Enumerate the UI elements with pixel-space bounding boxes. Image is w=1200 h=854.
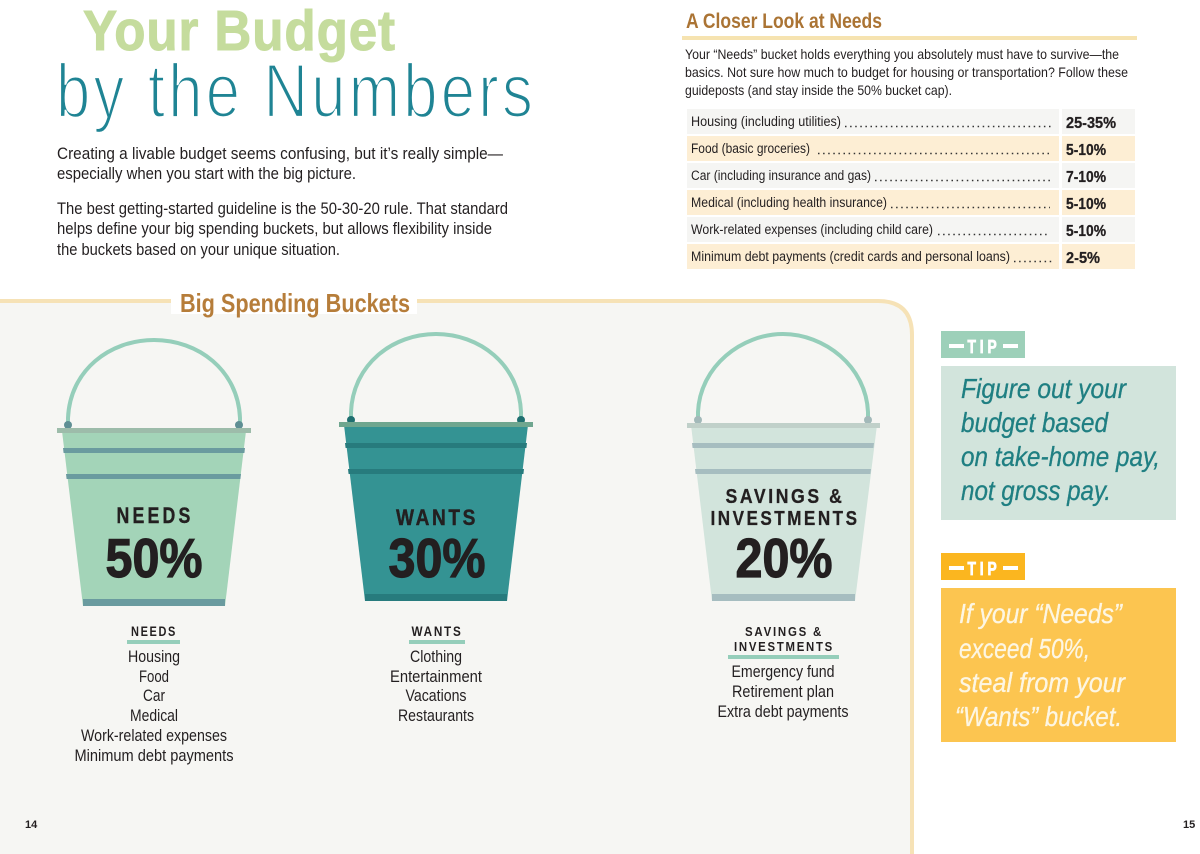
list: needs: Minimum debt payments [74,747,234,765]
tip text [955,598,1127,732]
list: savings and investments: Extra debt payments [718,703,848,721]
needs guidepost table: Work-related expenses (including child care) [691,222,933,237]
needs description: basics. Not sure how much to budget for housing or transportation? Follow these [685,64,1128,80]
tip text: exceed 50%, [959,633,1090,664]
page number 15: 15 [1183,819,1195,831]
heading: a closer look at needs: A Closer Look at Needs [686,10,882,33]
tip text: Figure out your [961,373,1127,404]
list: wants: WANTS [412,624,462,639]
needs description [685,46,1128,98]
intro text: Creating a livable budget seems confusing, but it’s really simple— [57,145,503,163]
heading: big spending buckets: Big Spending Buckets [180,288,410,318]
tip text: steal from your [959,667,1127,698]
tip label: TIP [968,559,1000,579]
needs guidepost table: 25-35% [1066,115,1116,132]
bucket value: 30%: 30% [388,527,486,589]
bucket label: savings and investments: INVESTMENTS [710,507,860,530]
panel: a closer look at needs [682,10,1137,269]
bucket value: 50%: 50% [106,527,202,589]
needs guidepost table: Car (including insurance and gas) [691,168,871,183]
list: savings and investments [718,624,848,721]
title [56,0,536,134]
panel: big spending buckets background [0,290,912,854]
list: wants: Entertainment [390,668,482,686]
title: Your Budget [83,0,396,63]
list: savings and investments: INVESTMENTS [734,639,834,654]
bucket label: savings and investments: SAVINGS & [726,485,844,508]
tip label: TIP [968,337,1000,357]
tip: take-home pay [941,331,1176,520]
needs description: Your “Needs” bucket holds everything you absolutely must have to survive—the [685,46,1119,62]
page number 14: 14 [25,819,38,831]
needs guidepost table: Minimum debt payments (credit cards and personal loans) [691,249,1010,264]
list: needs: NEEDS [131,624,177,639]
list: wants: Vacations [406,687,466,705]
tip text [961,373,1160,506]
needs guidepost table [687,109,1135,269]
intro text: especially when you start with the big picture. [57,165,356,183]
intro text: the buckets based on your unique situation. [57,241,340,259]
list: needs [74,624,234,765]
tip text: If your “Needs” [959,598,1123,629]
needs guidepost table: 5-10% [1066,142,1106,159]
intro text: The best getting-started guideline is the 50-30-20 rule. That standard [57,200,508,218]
needs guidepost table: 7-10% [1066,169,1106,186]
list: needs: Housing [128,648,180,666]
tip label [941,553,1025,580]
icon: needs bucket [57,340,251,606]
needs guidepost table: Medical (including health insurance) [691,195,887,210]
needs description: guideposts (and stay inside the 50% bucket cap). [685,82,952,98]
list: savings and investments: SAVINGS & [745,624,823,639]
icon: wants bucket [339,334,533,601]
list: wants [390,624,482,725]
icon: savings and investments bucket [687,334,880,601]
intro text: helps define your big spending buckets, but allows flexibility inside [57,220,492,238]
list: savings and investments: Emergency fund [732,663,834,681]
intro text [57,145,508,259]
list: wants: Restaurants [398,707,474,725]
bucket value: 20%: 20% [736,527,832,589]
list: savings and investments: Retirement plan [732,683,834,701]
tip text: not gross pay. [961,475,1111,506]
list: needs: Car [143,687,165,705]
needs guidepost table: Food (basic groceries) [691,141,810,156]
list: needs: Food [139,668,169,686]
bucket label: wants: WANTS [396,505,478,530]
tip text: “Wants” bucket. [955,701,1122,732]
list: needs: Medical [130,707,178,725]
tip text: on take-home pay, [961,441,1160,472]
needs guidepost table: 5-10% [1066,196,1106,213]
tip label [941,331,1025,358]
bucket label: needs: NEEDS [116,503,194,528]
tip text: budget based [961,407,1109,438]
needs guidepost table: Housing (including utilities) [691,114,841,129]
needs guidepost table: 5-10% [1066,223,1106,240]
bucket label: savings and investments [710,485,860,530]
title: by the Numbers [56,49,536,134]
list: needs: Work-related expenses [81,727,227,745]
tip: steal from wants [941,553,1176,742]
list: wants: Clothing [410,648,462,666]
needs guidepost table: 2-5% [1066,250,1100,267]
